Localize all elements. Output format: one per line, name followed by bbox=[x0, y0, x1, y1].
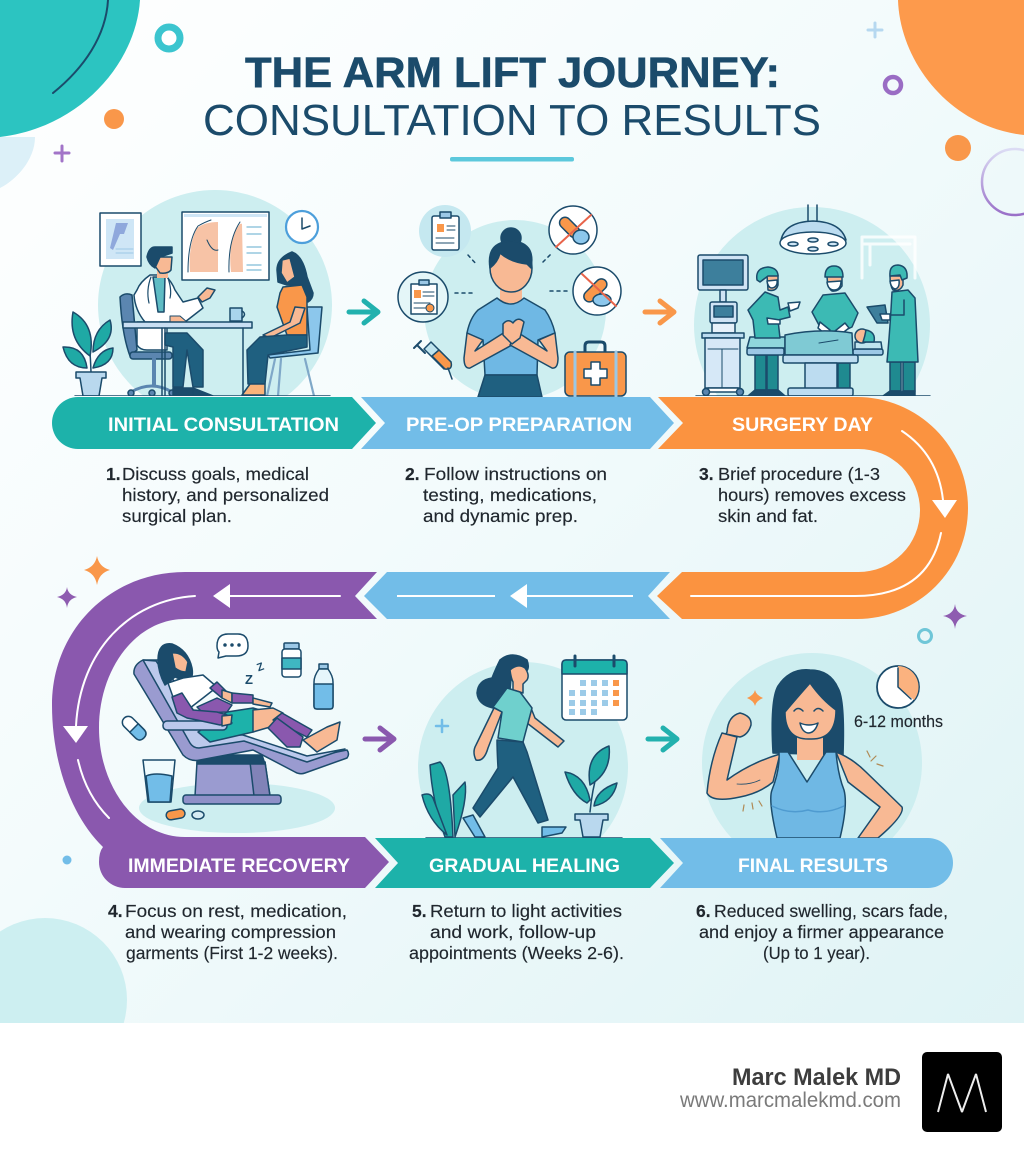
sleep z letters: Z bbox=[255, 661, 266, 674]
logo bbox=[922, 1052, 1002, 1132]
step 6 text: Reduced swelling, scars fade, bbox=[714, 901, 948, 921]
step 1 text: Discuss goals, medical bbox=[122, 464, 309, 484]
banner: final results: FINAL RESULTS bbox=[738, 855, 888, 877]
icon: syringe bbox=[414, 341, 452, 379]
title: CONSULTATION TO RESULTS bbox=[203, 96, 821, 145]
icon: no pills 1 bbox=[549, 206, 597, 254]
banner: initial consultation: INITIAL CONSULTATION bbox=[108, 414, 339, 436]
banner: immediate recovery with U-turn: IMMEDIATE RECOVERY bbox=[128, 855, 350, 877]
desk bbox=[123, 308, 252, 396]
surgeon center bbox=[812, 266, 858, 390]
banner: gradual healing bbox=[375, 838, 674, 888]
illustration: gradual healing bbox=[418, 654, 628, 838]
step 2 text: 2. bbox=[405, 464, 420, 484]
step 1 text: surgical plan. bbox=[122, 506, 232, 526]
surgeon right bbox=[867, 265, 918, 396]
resting woman bbox=[158, 644, 340, 752]
icon: chart clipboard bbox=[419, 205, 471, 257]
sparkle bbox=[747, 690, 763, 706]
step 1 text: 1. bbox=[106, 464, 121, 484]
step 5 text: Return to light activities bbox=[430, 901, 622, 921]
monitor cart bbox=[698, 255, 748, 396]
banner: pre-op preparation bbox=[361, 397, 674, 449]
water bottle bbox=[314, 664, 333, 709]
step 4 text: 4. bbox=[108, 901, 123, 921]
step 6 text: 6. bbox=[696, 901, 711, 921]
woman flexing bbox=[707, 670, 902, 838]
step 4 text: Focus on rest, medication, bbox=[125, 901, 347, 921]
clock bbox=[286, 211, 318, 243]
step 1 text: history, and personalized bbox=[122, 485, 329, 505]
step 3 text: Brief procedure (1-3 bbox=[718, 464, 880, 484]
step 6 text bbox=[696, 901, 948, 963]
step 2 text: testing, medications, bbox=[423, 485, 597, 505]
banner: gradual healing: GRADUAL HEALING bbox=[429, 855, 620, 877]
step 5 text: 5. bbox=[412, 901, 427, 921]
person bbox=[464, 228, 558, 397]
step 2 text: and dynamic prep. bbox=[423, 506, 578, 526]
icon: test clipboard bbox=[398, 272, 448, 322]
icon: no pills 2 bbox=[573, 267, 621, 315]
anatomy screen bbox=[182, 212, 269, 280]
banner: initial consultation bbox=[52, 397, 376, 449]
clock bbox=[877, 666, 919, 708]
illustration: surgery day bbox=[694, 204, 931, 396]
poster bbox=[100, 213, 141, 266]
plant left bbox=[422, 762, 466, 837]
step 3 text bbox=[699, 464, 906, 526]
step 3 text: 3. bbox=[699, 464, 714, 484]
calendar bbox=[562, 656, 627, 720]
motion ticks bbox=[743, 751, 883, 811]
step 3 text: skin and fat. bbox=[718, 506, 818, 526]
operating table and patient bbox=[747, 329, 883, 396]
glass of water bbox=[143, 760, 175, 802]
recovery chair bbox=[134, 660, 348, 804]
step 5 text: appointments (Weeks 2-6). bbox=[409, 943, 624, 963]
website: www.marcmalekmd.com bbox=[679, 1089, 901, 1112]
sleep z letters: Z bbox=[245, 672, 253, 687]
illustration: immediate recovery bbox=[120, 634, 348, 833]
icon: first aid kit bbox=[565, 342, 626, 396]
arrow: step 5 to 6 bbox=[648, 728, 677, 750]
banner: surgery day with U-turn: SURGERY DAY bbox=[732, 414, 873, 436]
speech bubble bbox=[217, 634, 248, 658]
banner: pre-op preparation: PRE-OP PREPARATION bbox=[406, 414, 632, 436]
clock label: 6-12 months bbox=[854, 713, 943, 731]
step 2 text bbox=[405, 464, 607, 526]
surgical lamp bbox=[780, 205, 846, 254]
pill capsule bbox=[120, 714, 148, 742]
title bbox=[203, 49, 821, 145]
step 4 text: and wearing compression bbox=[125, 922, 336, 942]
arrow: step 1 to 2 bbox=[349, 301, 378, 323]
doctor bbox=[120, 247, 215, 396]
step 5 text: and work, follow-up bbox=[430, 922, 596, 942]
banner: surgery day with U-turn bbox=[657, 397, 968, 619]
step 6 text: (Up to 1 year). bbox=[763, 943, 870, 963]
plant right bbox=[565, 746, 617, 837]
step 4 text bbox=[108, 901, 347, 963]
brand name: Marc Malek MD bbox=[732, 1064, 901, 1091]
medicine bottle bbox=[282, 643, 301, 677]
dashed connectors bbox=[455, 253, 567, 293]
footer bbox=[0, 1023, 1024, 1154]
surgeon left bbox=[747, 267, 800, 396]
arrow: step 2 to 3 bbox=[645, 301, 674, 323]
title: THE ARM LIFT JOURNEY: bbox=[245, 49, 780, 97]
small pills bbox=[165, 808, 204, 820]
illustration: final results bbox=[702, 653, 922, 838]
illustration: initial consultation bbox=[62, 190, 332, 396]
walking woman bbox=[463, 655, 566, 837]
patient woman bbox=[242, 252, 322, 396]
step 5 text bbox=[409, 901, 624, 963]
title underline bbox=[450, 157, 574, 162]
step 2 text: Follow instructions on bbox=[424, 464, 607, 484]
illustration: pre-op preparation bbox=[398, 205, 626, 400]
plant bbox=[63, 312, 113, 396]
sleep z letters bbox=[245, 661, 266, 687]
step 4 text: garments (First 1-2 weeks). bbox=[126, 943, 338, 963]
step 6 text: and enjoy a firmer appearance bbox=[699, 922, 944, 942]
banner: immediate recovery with U-turn bbox=[52, 572, 389, 888]
step 1 text bbox=[106, 464, 329, 526]
arrow: step 4 to 5 bbox=[365, 728, 394, 750]
banner: final results bbox=[660, 838, 953, 888]
step 3 text: hours) removes excess bbox=[718, 485, 906, 505]
connector band: blue bbox=[364, 572, 670, 619]
